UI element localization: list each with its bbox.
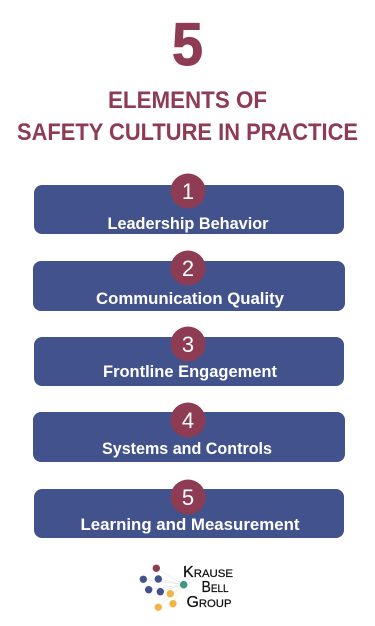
logo network icon	[140, 565, 188, 611]
logo wordmark: Group	[186, 594, 232, 611]
panel: element 5	[34, 480, 344, 538]
panel: element 3: 3	[182, 332, 194, 357]
panel: element 1: Leadership Behavior	[108, 214, 269, 233]
panel: element 5: Learning and Measurement	[80, 515, 300, 534]
panel: element 2: Communication Quality	[96, 289, 285, 308]
panel: element 4: 4	[182, 408, 194, 433]
panel: element 3: Frontline Engagement	[103, 362, 277, 381]
panel: element 2: 2	[182, 256, 194, 281]
logo: Krause Bell Group	[140, 564, 233, 611]
heading line 1: ELEMENTS OF	[108, 87, 267, 114]
panel: element 1: 1	[182, 179, 194, 204]
logo wordmark: Bell	[202, 579, 228, 596]
panel: element 4: Systems and Controls	[102, 439, 272, 458]
title	[17, 11, 358, 146]
panel: element 2	[33, 250, 345, 311]
panel: element 3	[34, 326, 344, 386]
panel: element 4	[33, 402, 345, 462]
panel: element 1	[34, 174, 344, 234]
logo wordmark	[183, 564, 233, 611]
panel: element 5: 5	[182, 485, 194, 510]
logo wordmark: Krause	[183, 564, 233, 581]
big number 5: 5	[172, 11, 203, 78]
